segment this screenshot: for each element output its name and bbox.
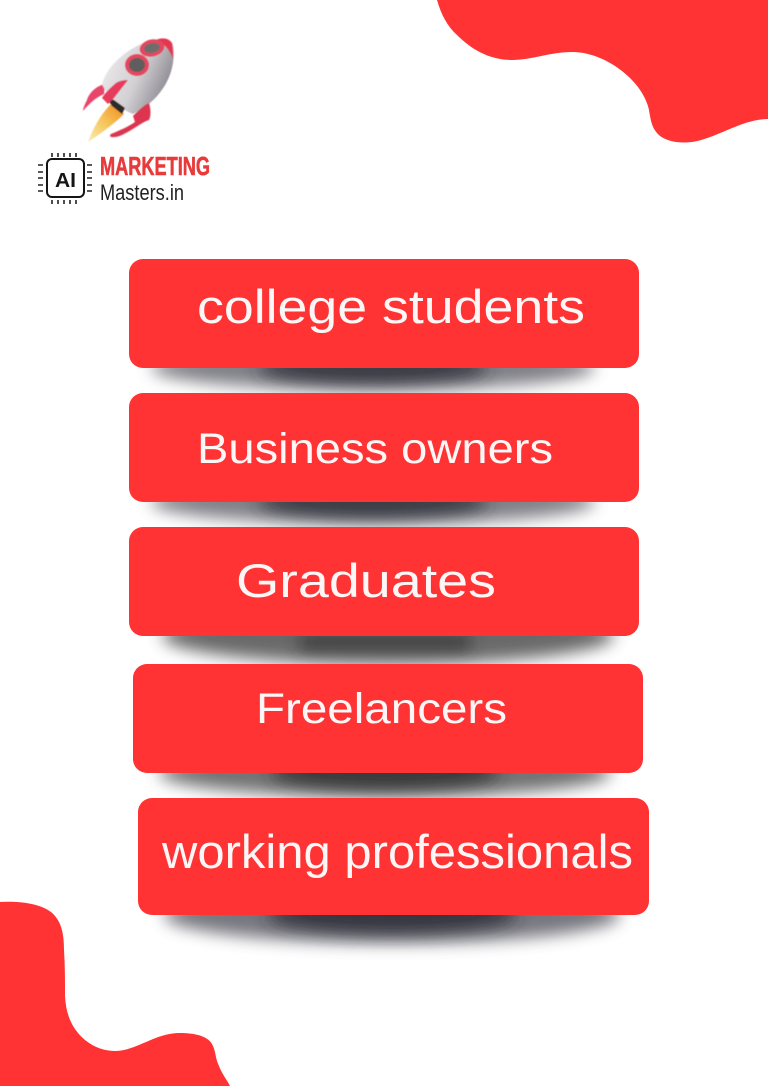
card: working professionals — [138, 798, 649, 943]
card: Graduates — [129, 527, 639, 664]
card: college students: college students — [197, 280, 585, 333]
card: Freelancers — [133, 664, 643, 797]
background blob: bottom left — [0, 902, 230, 1086]
icon: AI chip — [38, 153, 92, 204]
card: Business owners — [129, 393, 639, 524]
logo wordmark: Masters.in: Masters.in — [100, 180, 184, 205]
icon: rocket — [83, 37, 174, 142]
card: working professionals: working professionals — [161, 825, 633, 878]
background blob: top right — [437, 0, 768, 142]
card: Business owners: Business owners — [197, 425, 553, 473]
card: college students — [129, 259, 639, 390]
icon: AI chip: AI — [55, 170, 76, 192]
logo wordmark: MARKETING: MARKETING — [100, 151, 210, 181]
logo — [38, 37, 210, 205]
card: Graduates: Graduates — [236, 554, 496, 607]
card: Freelancers: Freelancers — [256, 685, 507, 733]
